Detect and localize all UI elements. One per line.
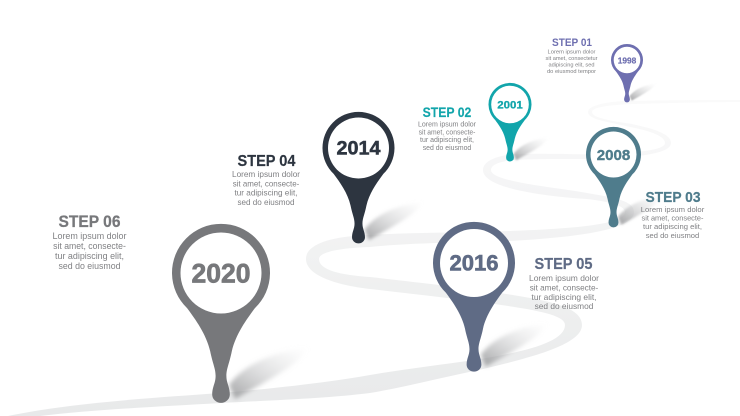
text block: step 03: sit amet, consecte- [642, 214, 704, 223]
text block: step 05: tur adipiscing elit, [532, 292, 596, 302]
text block: step 06: tur adipiscing elit, [55, 251, 124, 261]
text block: step 06 [52, 212, 127, 271]
text block: step 05 [529, 256, 599, 311]
text block: step 05: Lorem ipsum dolor [529, 273, 599, 283]
text block: step 01 [546, 37, 598, 75]
map pin: 2014: 2014 [336, 138, 381, 160]
text block: step 01: Lorem ipsum dolor [548, 50, 596, 56]
text block: step 01: sit amet, consectetur [546, 56, 598, 62]
map pin: 2001: 2001 [497, 100, 523, 112]
map pin: 2008 [586, 127, 641, 227]
text block: step 06: sit amet, consecte- [53, 241, 126, 251]
map pin: 2016: 2016 [450, 250, 498, 276]
text block: step 06: STEP 06 [58, 212, 120, 231]
pin shadow: 1998 [630, 84, 656, 101]
text block: step 03 [641, 189, 705, 240]
pin shadow: 2014 [364, 202, 424, 240]
text block: step 03: tur adipiscing elit, [643, 222, 702, 231]
text block: step 04: sit amet, consecte- [233, 179, 300, 188]
text block: step 05: sed do eiusmod [535, 301, 594, 311]
text block: step 02: sit amet, consecte- [419, 129, 476, 136]
text block: step 02: tur adipiscing elit, [420, 137, 474, 144]
map pin: 2020 [172, 224, 270, 403]
text block: step 04 [232, 153, 300, 207]
text block: step 04: tur adipiscing elit, [234, 189, 298, 198]
text block: step 03: STEP 03 [646, 189, 700, 206]
map pin: 2001 [488, 83, 532, 161]
text block: step 01: do eiusmod tempor [547, 69, 596, 75]
text block: step 04: STEP 04 [238, 153, 296, 170]
pin shadow: 2016 [481, 323, 548, 367]
text block: step 02: Lorem ipsum dolor [418, 122, 477, 128]
text block: step 06: sed do eiusmod [58, 261, 121, 271]
text block: step 04: sed do eiusmod [238, 198, 295, 207]
pin shadow: 2020 [229, 347, 309, 399]
text block: step 02: STEP 02 [423, 105, 471, 120]
text block: step 01: STEP 01 [552, 37, 592, 49]
text block: step 05: STEP 05 [534, 256, 593, 273]
text block: step 05: sit amet, consecte- [530, 282, 598, 292]
map pin: 1998 [611, 44, 643, 102]
map pin: 2014 [322, 112, 394, 243]
pin shadow: 2001 [514, 137, 549, 160]
text block: step 02: sed do eiusmod [423, 145, 471, 152]
map pin: 2020: 2020 [192, 258, 250, 288]
text block: step 04: Lorem ipsum dolor [232, 170, 300, 179]
text block: step 03: Lorem ipsum dolor [641, 205, 705, 214]
map pin: 1998: 1998 [618, 56, 637, 66]
map pin: 2016 [433, 222, 515, 372]
map pin: 2008: 2008 [597, 147, 630, 164]
text block: step 06: Lorem ipsum dolor [52, 231, 127, 241]
text block: step 03: sed do eiusmod [646, 231, 699, 240]
winding road [8, 100, 740, 416]
text block: step 01: adipiscing elit, sed [548, 62, 594, 68]
text block: step 02 [418, 105, 477, 152]
pin shadow: 2008 [618, 196, 663, 225]
